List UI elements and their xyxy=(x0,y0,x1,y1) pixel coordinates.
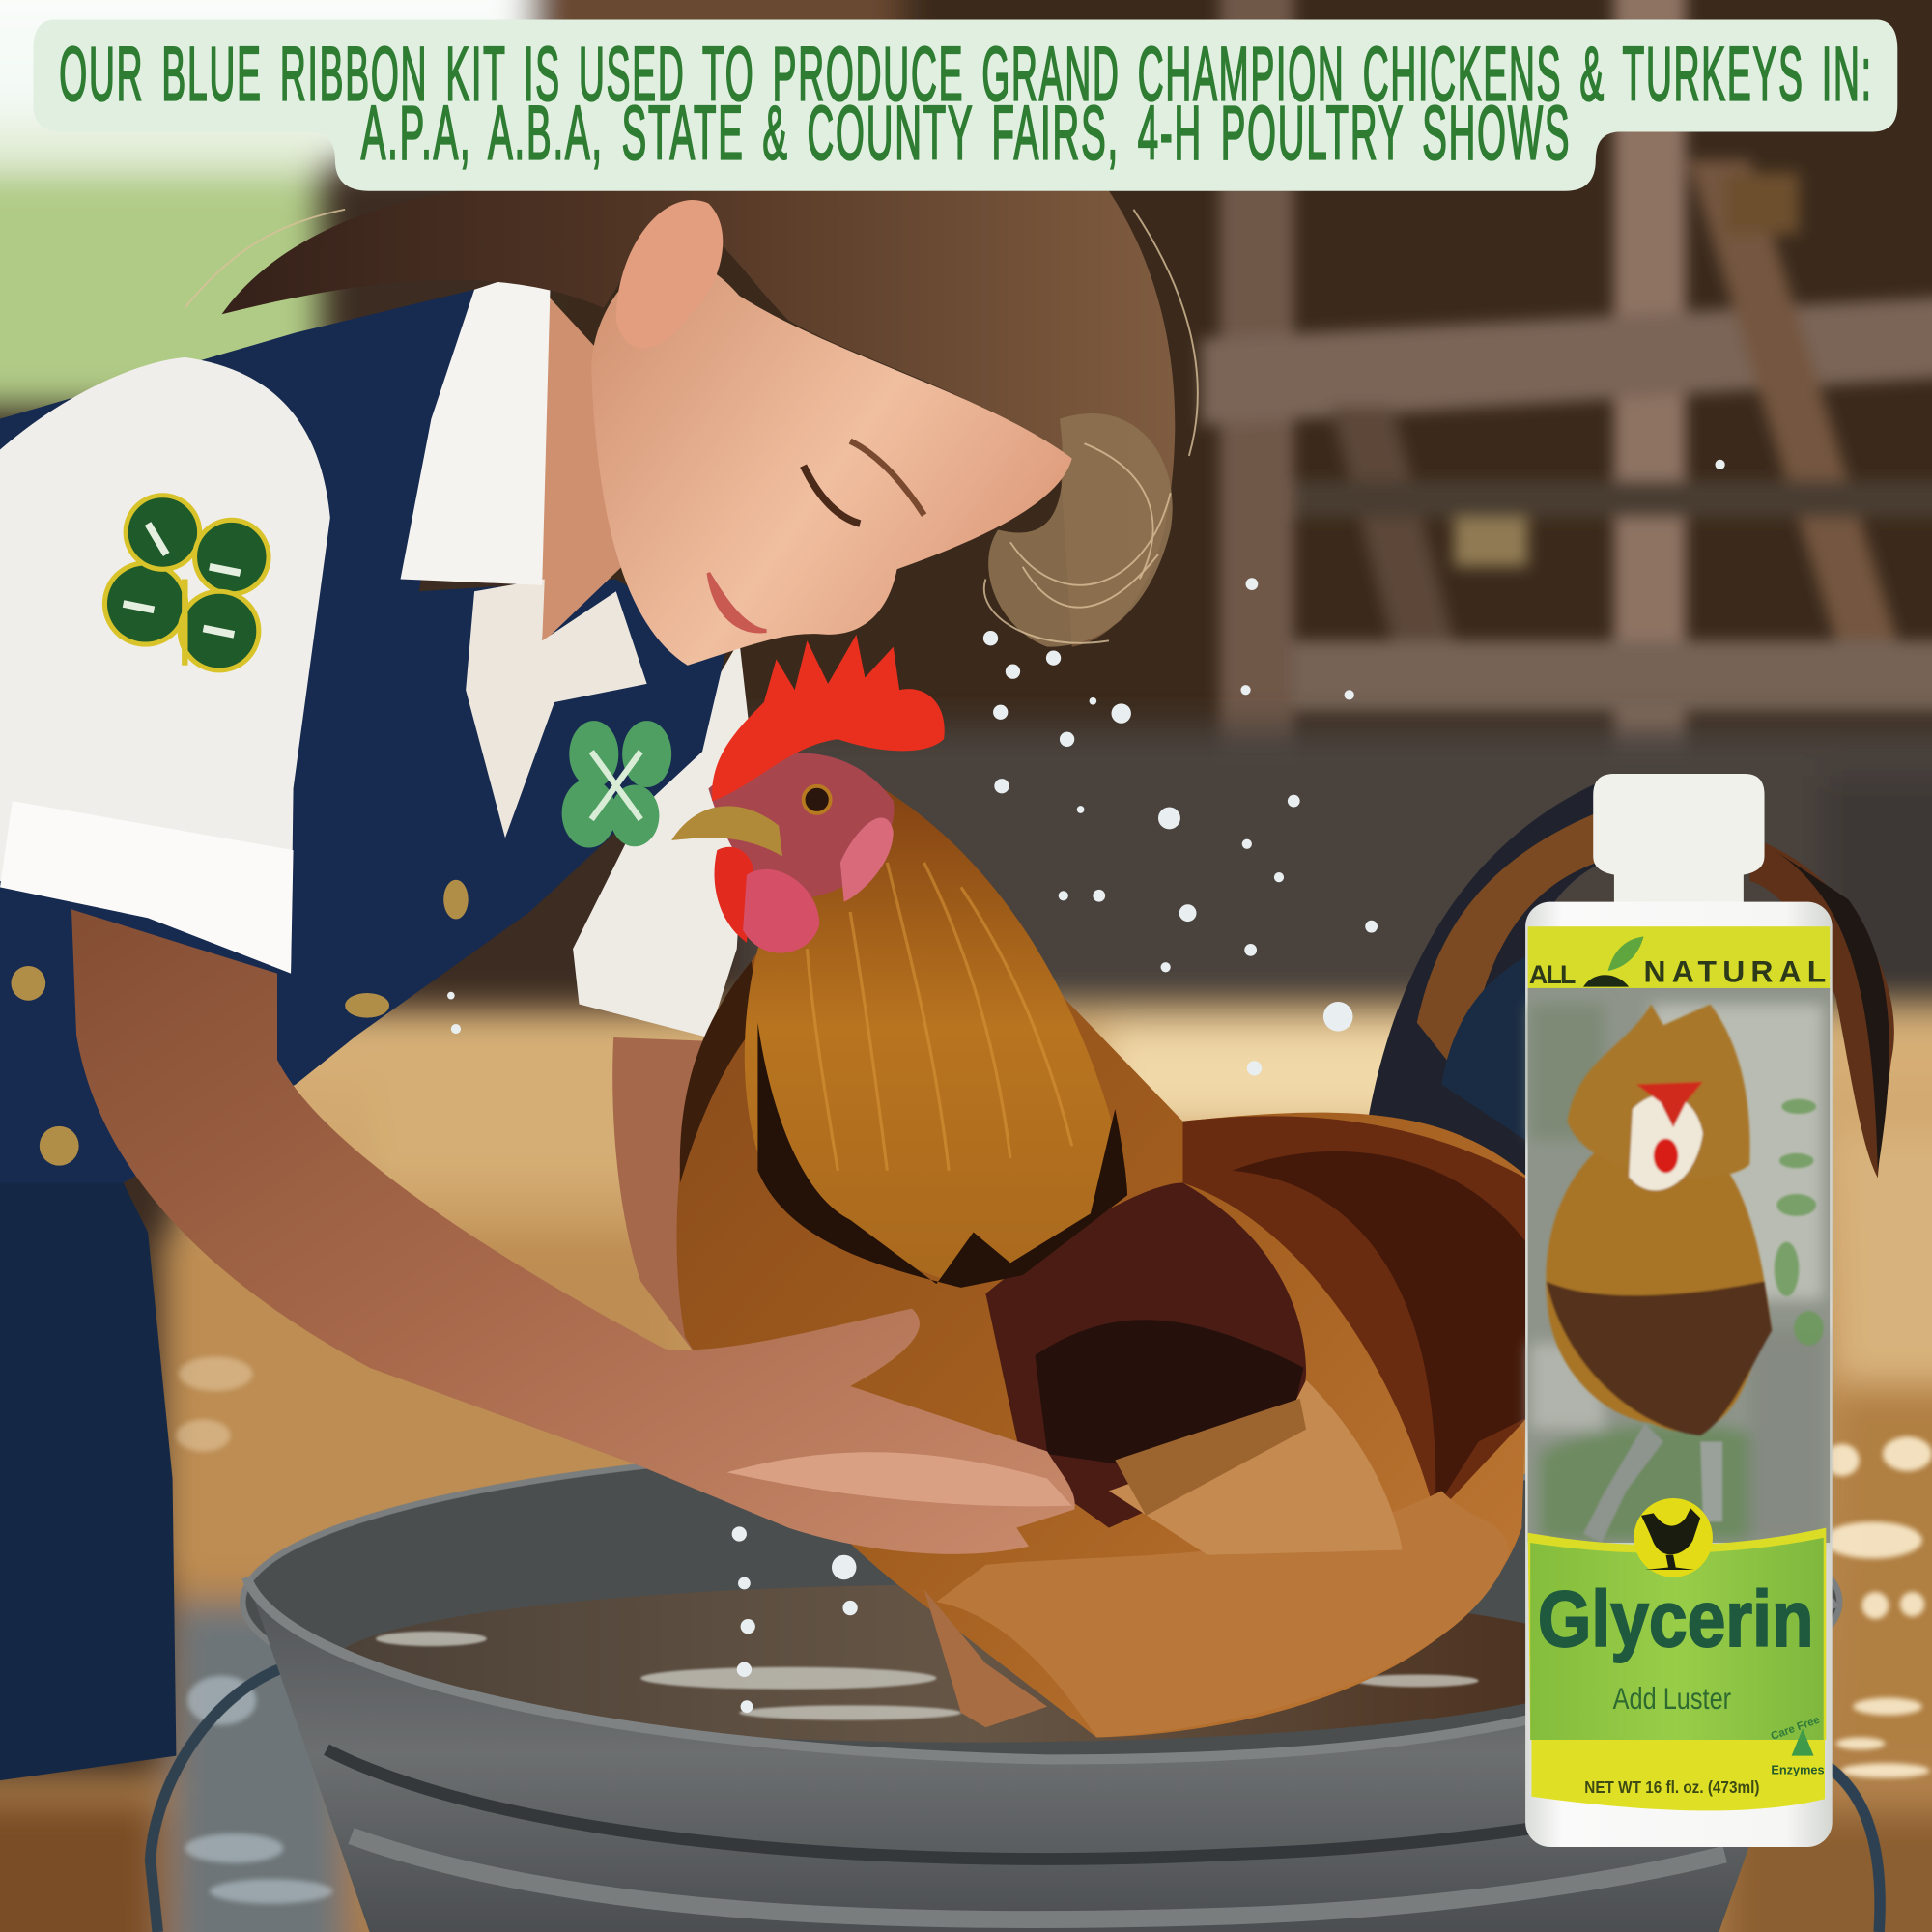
bottle body xyxy=(1525,902,1833,1847)
chicken legs xyxy=(1583,1423,1663,1543)
rooster front dark edge xyxy=(680,961,757,1182)
rooster rear plumage xyxy=(1182,1116,1534,1516)
subtitle: Add Luster xyxy=(1613,1681,1731,1716)
leaf icon xyxy=(1583,975,1629,987)
chicken silhouette icon xyxy=(1641,1508,1700,1570)
vest xyxy=(0,290,727,1182)
rooster legs xyxy=(924,1589,1047,1727)
tub front rim and wall xyxy=(246,1577,1836,1932)
water droplets xyxy=(447,460,1725,1713)
shirt chest xyxy=(466,579,647,838)
label photo of chicken xyxy=(1528,988,1830,1543)
care free logo: Care Free xyxy=(1770,1715,1822,1743)
top yellow band xyxy=(1528,926,1830,991)
tub interior xyxy=(242,1445,1839,1758)
care free logo xyxy=(1770,1715,1825,1777)
chicken badge xyxy=(1634,1498,1713,1577)
tub: galvanized wash tub back and water xyxy=(151,1445,1880,1932)
chicken comb and wattle xyxy=(1636,1082,1703,1127)
vest buttons xyxy=(11,880,469,1166)
eye lashes xyxy=(804,466,860,524)
green label panel xyxy=(1528,1498,1826,1810)
lips xyxy=(708,573,766,632)
rooster head xyxy=(708,753,894,899)
rooster lower body xyxy=(936,1491,1509,1737)
tub water xyxy=(332,1584,1614,1743)
sleeve xyxy=(0,357,330,974)
rooster comb xyxy=(712,635,945,801)
hair xyxy=(222,186,1175,647)
chicken body xyxy=(1546,1146,1772,1432)
collar xyxy=(401,265,551,585)
rooster tail feathers xyxy=(1368,783,1894,1182)
all natural text: ALL xyxy=(1529,960,1576,989)
left tub handle xyxy=(151,1663,296,1932)
rooster neck hackle xyxy=(745,770,1127,1283)
rooster wing xyxy=(985,1182,1306,1528)
bottle cap xyxy=(1593,774,1765,906)
far sleeve xyxy=(573,640,750,1037)
tub body xyxy=(246,1577,1824,1932)
chicken crest xyxy=(1567,1005,1750,1178)
product name: Glycerin xyxy=(1538,1576,1814,1663)
title banner xyxy=(33,19,1897,191)
far arm xyxy=(612,1037,708,1355)
4-H clover patch on sleeve xyxy=(104,496,269,670)
net weight: NET WT 16 fl. oz. (473ml) xyxy=(1584,1777,1759,1797)
4-H clover patch on vest xyxy=(562,721,671,848)
product bottle: Glycerin xyxy=(1525,774,1833,1847)
jeans xyxy=(0,1109,176,1780)
face xyxy=(591,260,1072,666)
care free logo: Enzymes xyxy=(1771,1763,1825,1777)
eyebrow xyxy=(850,441,924,515)
banner headline xyxy=(59,30,1873,176)
near arm and hand xyxy=(71,909,1075,1554)
ear xyxy=(616,200,723,349)
right tub handle xyxy=(1821,1762,1880,1932)
banner background xyxy=(33,19,1897,191)
blonde curls xyxy=(988,413,1173,647)
rooster xyxy=(671,635,1894,1737)
top yellow band: NATURAL xyxy=(1644,954,1826,989)
neck xyxy=(542,290,635,643)
rooster body xyxy=(677,788,1534,1737)
rooster beak xyxy=(671,806,782,856)
girl in 4-H uniform xyxy=(0,186,1198,1780)
rooster wattles xyxy=(715,818,894,953)
rooster eye xyxy=(804,786,831,813)
